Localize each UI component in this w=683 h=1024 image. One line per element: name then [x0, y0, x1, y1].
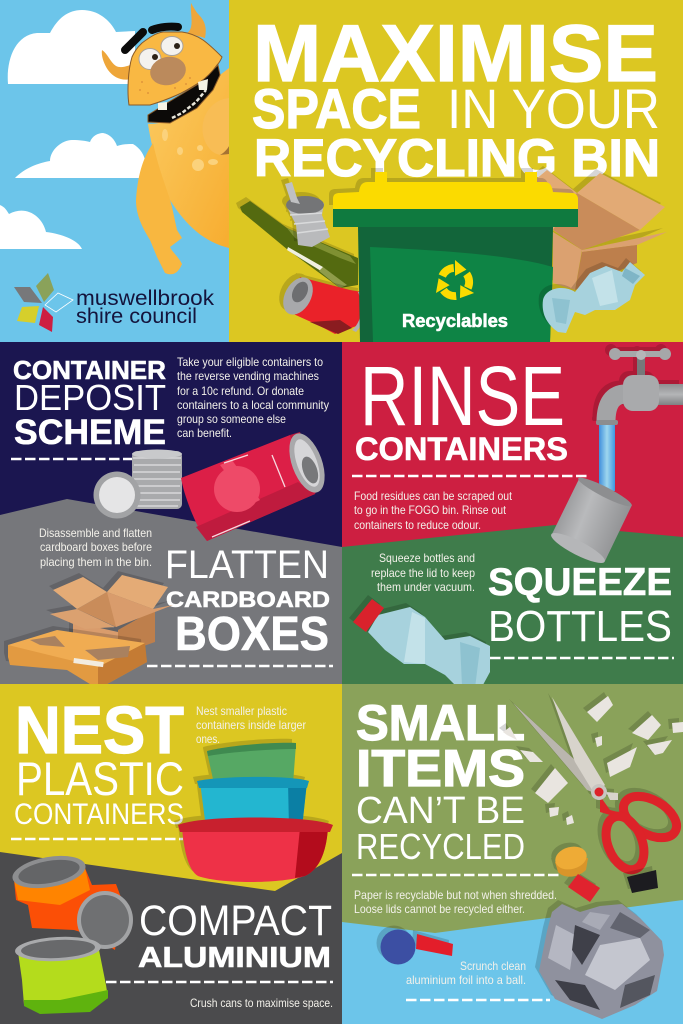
- heading: container deposit scheme: SCHEME: [14, 413, 166, 452]
- heading: squeeze bottles: SQUEEZE: [488, 561, 672, 604]
- text: rinse description: [354, 489, 513, 532]
- eyes: [139, 48, 161, 70]
- left horn: [102, 50, 131, 80]
- logo: council name: [76, 287, 215, 328]
- text: container deposit description: group so someone else: [177, 412, 286, 426]
- text: container deposit description: [177, 355, 329, 440]
- illustration: bottle lids: [380, 843, 658, 964]
- title: [252, 9, 660, 188]
- heading: nest plastic containers: CONTAINERS: [14, 798, 184, 831]
- text: nest description: ones.: [196, 732, 220, 746]
- illustration: crushed green can: [14, 935, 108, 1014]
- illustration: nested containers: [178, 743, 333, 882]
- text: squeeze description: [371, 551, 475, 594]
- text: nest description: containers inside larger: [196, 718, 306, 732]
- text: foil description: [406, 959, 526, 987]
- nose: [150, 56, 186, 86]
- text: small items description: [354, 888, 557, 916]
- heading: small items can't be recycled: [356, 695, 525, 867]
- heading: flatten cardboard boxes: [165, 543, 330, 661]
- right horn: [187, 3, 206, 38]
- text: foil description: Scrunch clean: [460, 959, 526, 973]
- text: compact description: Crush cans to maximise space.: [190, 996, 333, 1010]
- panel: rinse containers: [342, 342, 683, 684]
- body: [148, 68, 229, 248]
- panel: sky header: [0, 0, 229, 342]
- illustration: tap: [596, 348, 683, 425]
- illustration: recycling bin: [333, 172, 578, 342]
- panel shape: squeeze bottles: [342, 525, 683, 684]
- bin body: [358, 227, 553, 342]
- heading: rinse containers: CONTAINERS: [355, 431, 568, 467]
- illustration: tin can under tap: [548, 474, 634, 568]
- eyebrows: [125, 32, 143, 50]
- text: foil description: aluminium foil into a ball.: [406, 973, 526, 987]
- illustration: crushed tin can: [285, 182, 330, 247]
- heading: small items can't be recycled: RECYCLED: [356, 826, 525, 867]
- shoulder: [202, 98, 233, 155]
- heading: small items can't be recycled: SMALL: [356, 695, 525, 751]
- head freckles: [139, 77, 191, 94]
- illustration: plastic bottle: [543, 262, 645, 333]
- panel: container deposit scheme: [0, 342, 342, 684]
- lower teeth: [172, 90, 206, 118]
- bin label: Recyclables: [402, 311, 508, 331]
- text: nest description: Nest smaller plastic: [196, 704, 287, 718]
- text: small items description: Paper is recyclable but not when shredded.: [354, 888, 557, 902]
- recycling symbol: [430, 260, 480, 304]
- title: RECYCLING BIN: [254, 129, 660, 188]
- heading: nest plastic containers: [14, 693, 184, 831]
- text: rinse description: Food residues can be scraped out: [354, 489, 513, 503]
- illustration: crushed red can: [277, 272, 364, 334]
- text: container deposit description: containers to a local community: [177, 398, 329, 412]
- text: nest description: [196, 704, 306, 746]
- text: container deposit description: the reverse vending machines: [177, 369, 319, 383]
- title: SPACE: [252, 77, 421, 140]
- heading: nest plastic containers: NEST: [15, 693, 184, 768]
- heading: container deposit scheme: [13, 355, 166, 452]
- text: rinse description: to go in the FOGO bin. Rinse out: [354, 503, 507, 517]
- text: rinse description: containers to reduce odour.: [354, 518, 481, 532]
- text: flatten description: cardboard boxes before: [40, 540, 152, 554]
- body spots: [162, 129, 218, 171]
- arm: [136, 143, 182, 274]
- logo: council name: shire council: [76, 305, 197, 328]
- mouth: [148, 65, 220, 123]
- panel shape: flatten cardboard: [0, 499, 342, 684]
- illustration: open cardboard box: [50, 575, 173, 655]
- title: IN YOUR: [447, 77, 660, 140]
- heading: container deposit scheme: CONTAINER: [13, 355, 166, 385]
- heading: compact aluminium: ALUMINIUM: [138, 942, 331, 974]
- panel: nest plastic containers: [0, 684, 342, 1024]
- illustration: water stream: [599, 425, 615, 491]
- heading: squeeze bottles: BOTTLES: [488, 602, 672, 651]
- clouds: [0, 10, 146, 249]
- teeth: [158, 79, 208, 110]
- illustration: red drink can: [181, 429, 332, 541]
- panel shape: compact aluminium: [0, 852, 342, 1024]
- text: squeeze description: them under vacuum.: [377, 580, 475, 594]
- heading: nest plastic containers: PLASTIC: [16, 752, 184, 805]
- head: [128, 32, 222, 105]
- logo: council name: muswellbrook: [76, 287, 215, 310]
- illustration: aluminium foil ball: [539, 904, 664, 1019]
- mascot character: [102, 3, 233, 274]
- text: small items description: Loose lids cannot be recycled either.: [354, 902, 525, 916]
- text: squeeze description: Squeeze bottles and: [379, 551, 475, 565]
- text: container deposit description: Take your eligible containers to: [177, 355, 323, 369]
- text: container deposit description: can benefit.: [177, 426, 232, 440]
- panel: title background: [229, 0, 683, 342]
- heading: flatten cardboard boxes: BOXES: [175, 608, 329, 661]
- illustration: glass bottle: [240, 201, 358, 288]
- heading: rinse containers: RINSE: [360, 349, 565, 443]
- illustration: stacked lids: [132, 450, 182, 509]
- illustration: crushed orange can: [10, 851, 133, 950]
- heading: container deposit scheme: DEPOSIT: [14, 377, 166, 418]
- heading: small items can't be recycled: ITEMS: [356, 740, 525, 798]
- illustration: squeezed bottle: [353, 599, 490, 694]
- text: flatten description: placing them in the bin.: [40, 555, 152, 569]
- heading: squeeze bottles: [488, 561, 672, 651]
- logo: council star: [14, 273, 73, 332]
- illustration: cardboard box behind bin: [535, 170, 667, 290]
- text: flatten description: [39, 526, 152, 569]
- illustration: paper shreds: [503, 696, 683, 825]
- illustration: scissors: [513, 697, 683, 875]
- bin lid: [333, 172, 578, 209]
- illustration: flattened cardboard: [8, 630, 147, 689]
- illustration: single lid: [94, 472, 140, 518]
- text: container deposit description: for a 10c refund. Or donate: [177, 384, 304, 398]
- heading: flatten cardboard boxes: CARDBOARD: [166, 587, 330, 612]
- panel: small items: [342, 684, 683, 1024]
- bin rim: [333, 209, 578, 227]
- panel shape: aluminium foil: [342, 900, 683, 1024]
- text: flatten description: Disassemble and flatten: [39, 526, 152, 540]
- heading: flatten cardboard boxes: FLATTEN: [165, 543, 329, 587]
- heading: rinse containers: [355, 349, 568, 467]
- heading: small items can't be recycled: CAN’T BE: [356, 790, 525, 832]
- title: MAXIMISE: [253, 9, 658, 99]
- text: squeeze description: replace the lid to keep: [371, 566, 475, 580]
- heading: compact aluminium: COMPACT: [139, 897, 332, 945]
- heading: compact aluminium: [138, 897, 332, 974]
